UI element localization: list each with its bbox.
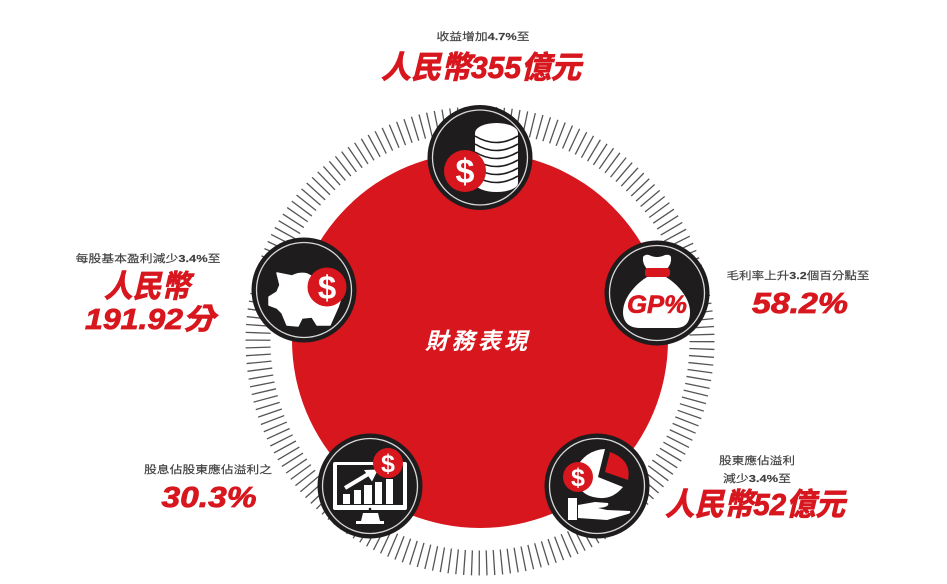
center title: 財務表現: [425, 328, 530, 354]
icon: pie chart and hand: $: [571, 464, 585, 492]
icon: piggy bank: [252, 238, 356, 342]
icon: rising chart on monitor: [318, 434, 422, 538]
radial tick ring: [258, 119, 702, 563]
label: basic earnings per share: 191.92分: [85, 304, 218, 336]
label: gross profit margin: 毛利率上升 3.2 個百分點至: [726, 269, 870, 282]
label: profit attributable to shareholders: [665, 454, 848, 522]
label: dividend payout: 股息佔股東應佔溢利之: [144, 463, 273, 476]
red central circle: [292, 152, 668, 528]
label: basic earnings per share: 每股基本盈利減少 3.4% 至: [76, 252, 220, 265]
icon: coins: $: [456, 153, 475, 191]
label: dividend payout: 30.3%: [162, 482, 256, 514]
label: revenue: 收益增加 4.7% 至: [436, 30, 530, 43]
icon: piggy bank: $: [318, 269, 336, 306]
label: gross profit margin: [726, 269, 870, 320]
label: dividend payout: [144, 463, 273, 514]
icon: pie chart and hand: [544, 434, 650, 538]
label: basic earnings per share: 人民幣: [104, 269, 195, 304]
label: gross profit margin: 58.2%: [752, 288, 848, 320]
icon: coins: [428, 105, 532, 210]
label: profit attributable to shareholders: 股東應佔溢利: [719, 454, 795, 467]
label: profit attributable to shareholders: 人民幣52億元: [665, 487, 848, 522]
label: revenue: [381, 30, 584, 85]
icon: GP money bag: GP%: [627, 291, 687, 319]
label: basic earnings per share: [76, 252, 220, 336]
label: profit attributable to shareholders: 減少 3.4% 至: [723, 472, 791, 485]
label: revenue: 人民幣355億元: [381, 50, 584, 85]
icon: GP money bag: [604, 240, 710, 346]
icon: rising chart on monitor: $: [381, 450, 395, 478]
